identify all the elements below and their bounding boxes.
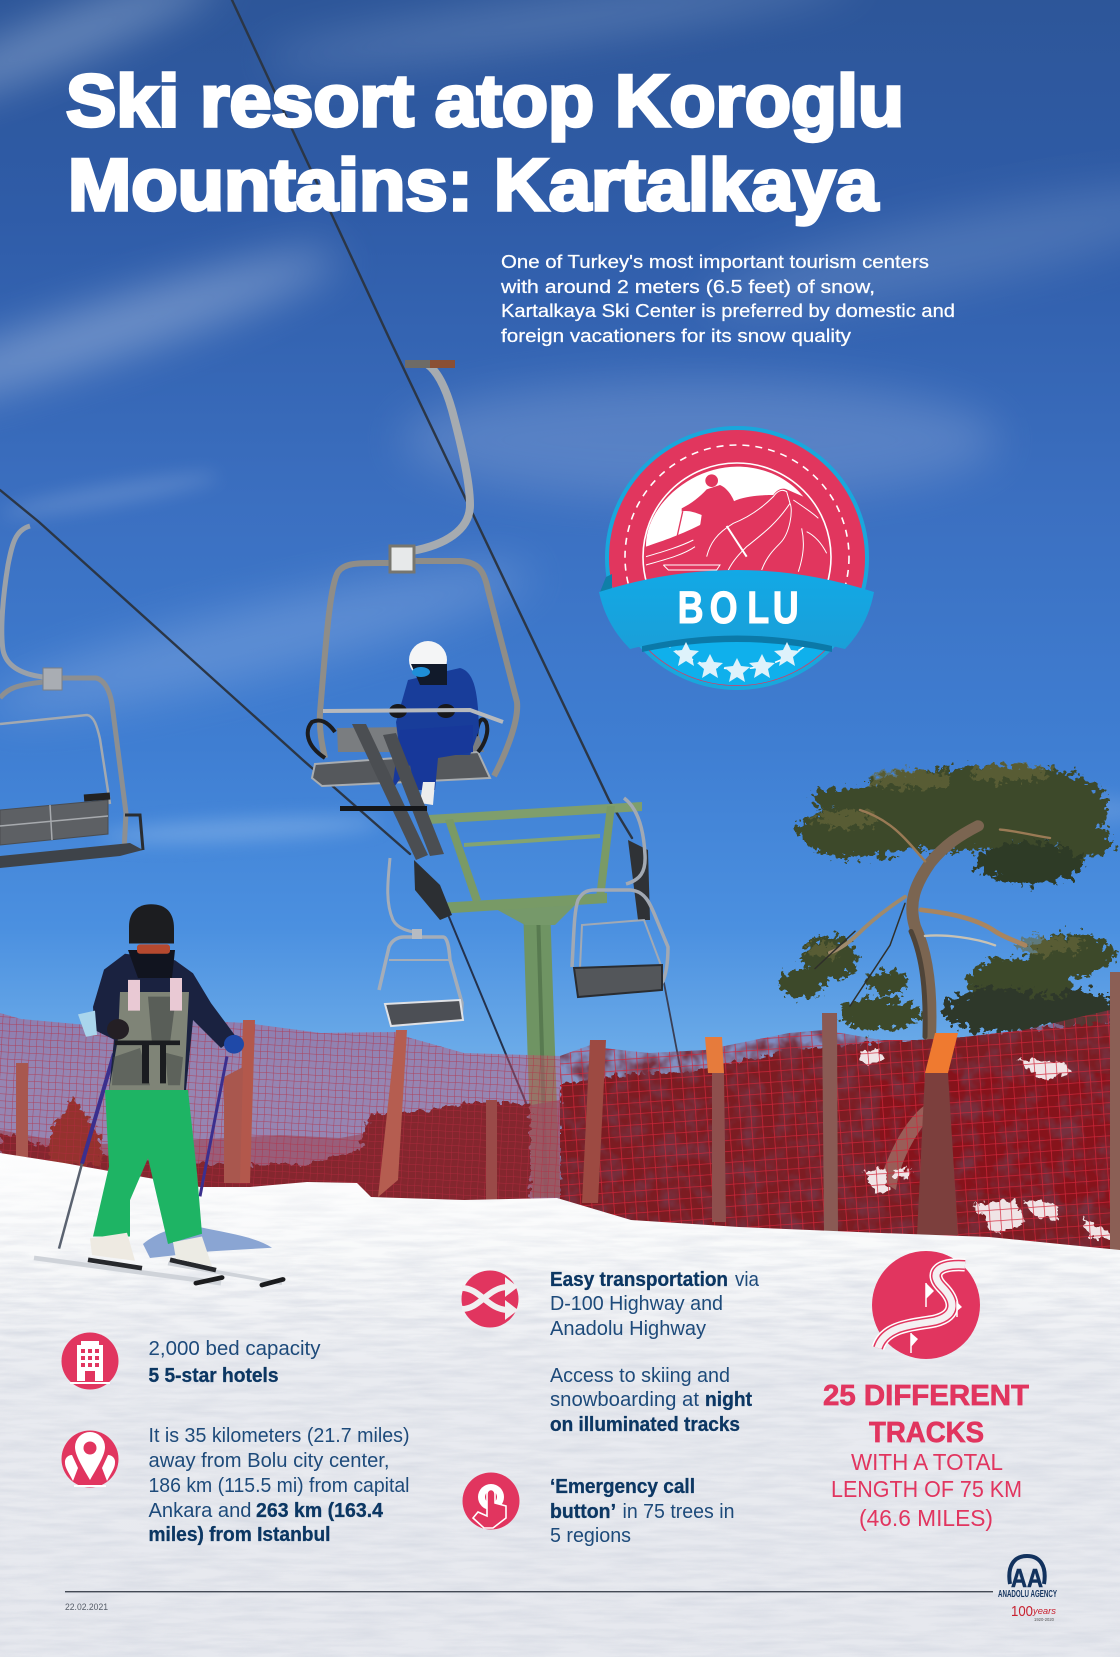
- rider: [389, 641, 479, 805]
- text: hotel capacity: 5 5-star hotels: [148, 1365, 278, 1387]
- badge: Bolu: [599, 426, 874, 690]
- logo: Anadolu Agency: ANADOLU AGENCY: [998, 1589, 1057, 1600]
- text: transportation and night skiing: night: [705, 1389, 752, 1411]
- photo: chairlift cables: [0, 0, 699, 1135]
- badge ribbon: [599, 570, 874, 652]
- text: distances: [148, 1425, 410, 1546]
- intro text: [500, 251, 955, 346]
- intro text: One of Turkey's most important tourism centers: [501, 251, 929, 272]
- logo: Anadolu Agency: years: [1032, 1606, 1057, 1616]
- text: transportation and night skiing: Access to skiing and: [550, 1365, 730, 1387]
- text: transportation and night skiing: [550, 1269, 760, 1436]
- text: distances: 263 km (163.4: [256, 1500, 384, 1522]
- intro text: with around 2 meters (6.5 feet) of snow,: [500, 276, 875, 297]
- text: emergency call: in 75 trees in: [622, 1501, 734, 1523]
- skis: [340, 724, 444, 860]
- photo: snow slope: [0, 1140, 1120, 1657]
- text: track statistics: LENGTH OF 75 KM: [831, 1476, 1022, 1502]
- text: transportation and night skiing: Easy transportation: [550, 1269, 728, 1291]
- footer: divider and date: 22.02.2021: [65, 1602, 108, 1613]
- text: emergency call: button’: [550, 1501, 616, 1523]
- text: emergency call: 5 regions: [550, 1525, 631, 1547]
- text: emergency call: [550, 1476, 734, 1547]
- icon: location pins: [62, 1430, 118, 1488]
- text: distances: 186 km (115.5 mi) from capital: [148, 1475, 410, 1497]
- photo: green lift tower: [414, 802, 650, 1197]
- title: [66, 61, 904, 226]
- badge ribbon: BOLU: [678, 582, 799, 633]
- intro text: foreign vacationers for its snow quality: [501, 325, 852, 346]
- text: track statistics: [823, 1380, 1029, 1531]
- text: transportation and night skiing: Anadolu Highway: [550, 1318, 706, 1340]
- text: track statistics: WITH A TOTAL: [851, 1449, 1003, 1475]
- text: hotel capacity: [148, 1338, 320, 1387]
- badge stars: [673, 642, 800, 682]
- text: transportation and night skiing: via: [735, 1269, 760, 1291]
- photo: small chair right of tower: [572, 798, 668, 997]
- text: distances: Ankara and: [148, 1500, 252, 1522]
- photo: main chair with rider: [308, 364, 517, 860]
- icon: hotel: [62, 1332, 118, 1390]
- text: distances: miles) from Istanbul: [148, 1524, 330, 1546]
- photo: skier: [34, 904, 283, 1285]
- logo: Anadolu Agency: 1920-2020: [1034, 1617, 1054, 1622]
- logo: Anadolu Agency: [998, 1556, 1057, 1622]
- text: transportation and night skiing: snowboarding at: [550, 1389, 699, 1411]
- photo: small chair behind tower, left: [379, 858, 463, 1026]
- text: distances: It is 35 kilometers (21.7 miles): [148, 1425, 410, 1447]
- text: distances: away from Bolu city center,: [148, 1450, 390, 1472]
- photo: left chair: [0, 526, 143, 868]
- text: track statistics: 25 DIFFERENT: [823, 1380, 1029, 1412]
- text: transportation and night skiing: on illuminated tracks: [550, 1414, 740, 1436]
- title: Mountains: Kartalkaya: [68, 145, 879, 226]
- text: track statistics: (46.6 MILES): [859, 1505, 993, 1531]
- text: hotel capacity: 2,000 bed capacity: [148, 1338, 320, 1360]
- badge illustration: skier and mountains: [642, 462, 832, 580]
- photo: net, forest and posts behind: [0, 972, 1120, 1270]
- text: emergency call: ‘Emergency call: [550, 1476, 695, 1498]
- logo: Anadolu Agency: AA: [1011, 1563, 1043, 1593]
- icon: winding track: [872, 1251, 980, 1359]
- intro text: Kartalkaya Ski Center is preferred by domestic and: [501, 300, 955, 321]
- title: Ski resort atop Koroglu: [66, 61, 904, 142]
- text: track statistics: TRACKS: [869, 1417, 984, 1449]
- logo: Anadolu Agency: 100: [1011, 1603, 1033, 1620]
- photo: pine tree: [780, 764, 1114, 1037]
- text: transportation and night skiing: D-100 Highway and: [550, 1293, 723, 1315]
- icon: emergency button hand: [462, 1472, 520, 1530]
- icon: shuffle roads: [462, 1270, 518, 1328]
